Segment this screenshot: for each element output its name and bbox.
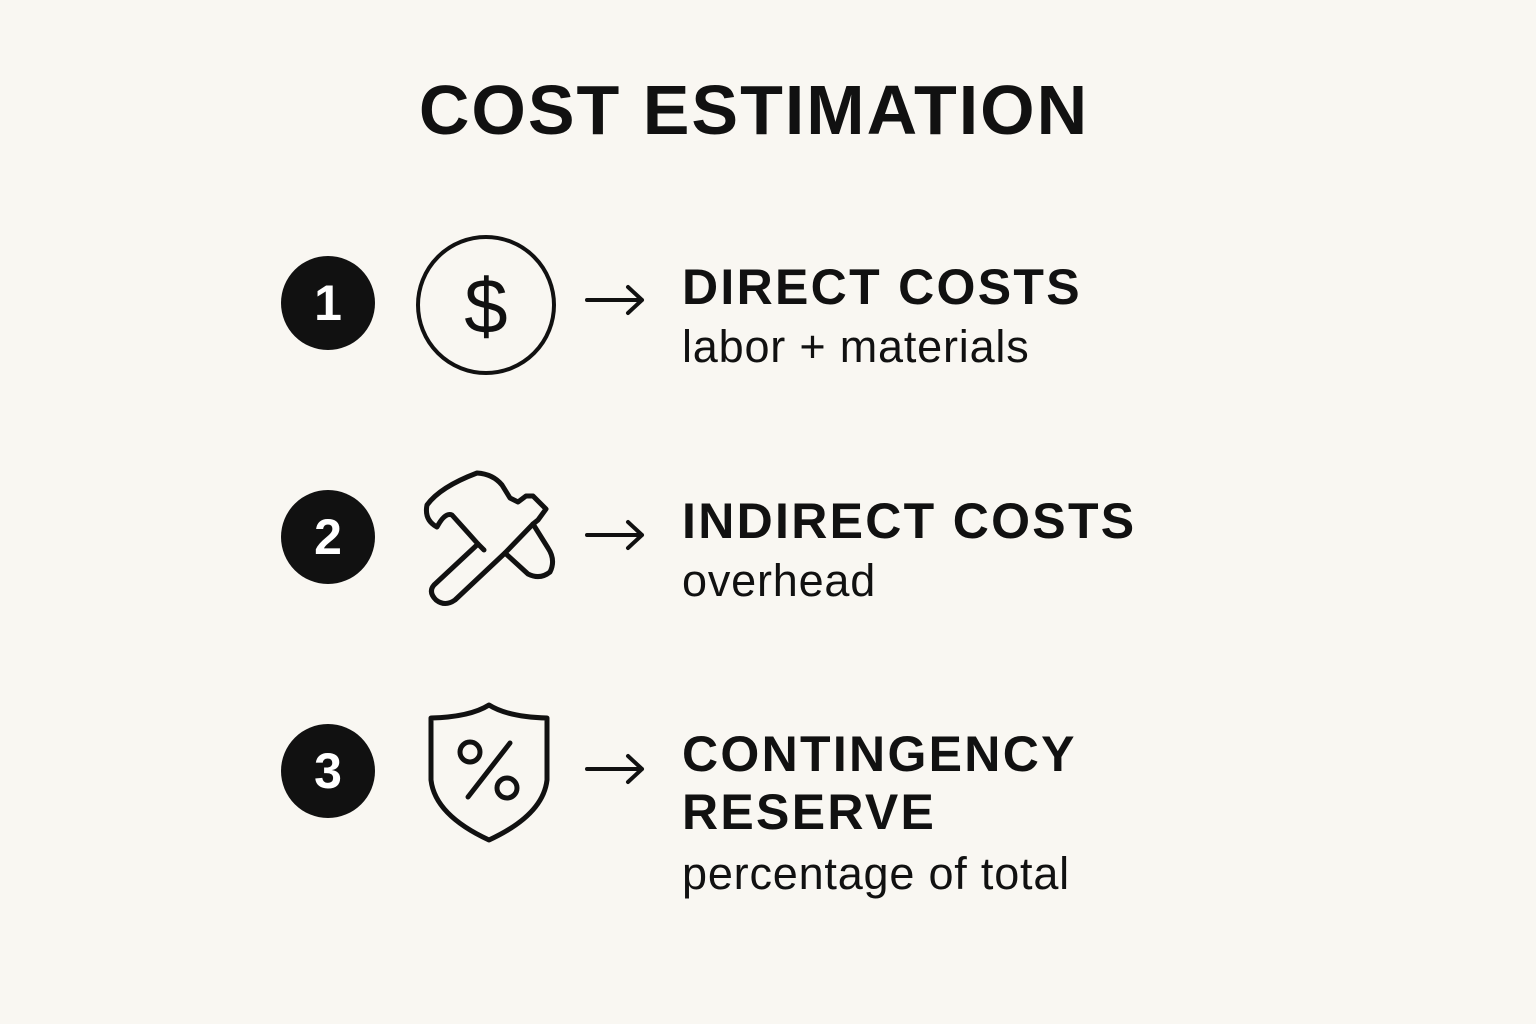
text: indirect costs: INDIRECT COSTS [682, 493, 1136, 549]
text: direct costs [682, 259, 1082, 372]
text: direct costs: labor + materials [682, 321, 1030, 372]
number badge 2 [281, 490, 375, 584]
icon: hammer [426, 473, 553, 604]
arrow 3 [587, 756, 642, 782]
text: contingency reserve: percentage of total [682, 848, 1070, 899]
icon: shield with percent [431, 705, 547, 840]
number badge 1: 1 [314, 275, 342, 331]
icon: dollar coin [418, 237, 554, 373]
text: contingency reserve: RESERVE [682, 784, 936, 840]
number badge 3: 3 [314, 743, 342, 799]
title: COST ESTIMATION [419, 71, 1089, 149]
text: contingency reserve: CONTINGENCY [682, 726, 1077, 782]
number badge 3 [281, 724, 375, 818]
text: direct costs: DIRECT COSTS [682, 259, 1082, 315]
text: contingency reserve [682, 726, 1077, 899]
text: indirect costs [682, 493, 1136, 606]
number badge 1 [281, 256, 375, 350]
arrow 2 [587, 522, 642, 548]
text: indirect costs: overhead [682, 555, 876, 606]
number badge 2: 2 [314, 509, 342, 565]
arrow 1 [587, 287, 642, 313]
icon: dollar coin: $ [464, 262, 508, 350]
